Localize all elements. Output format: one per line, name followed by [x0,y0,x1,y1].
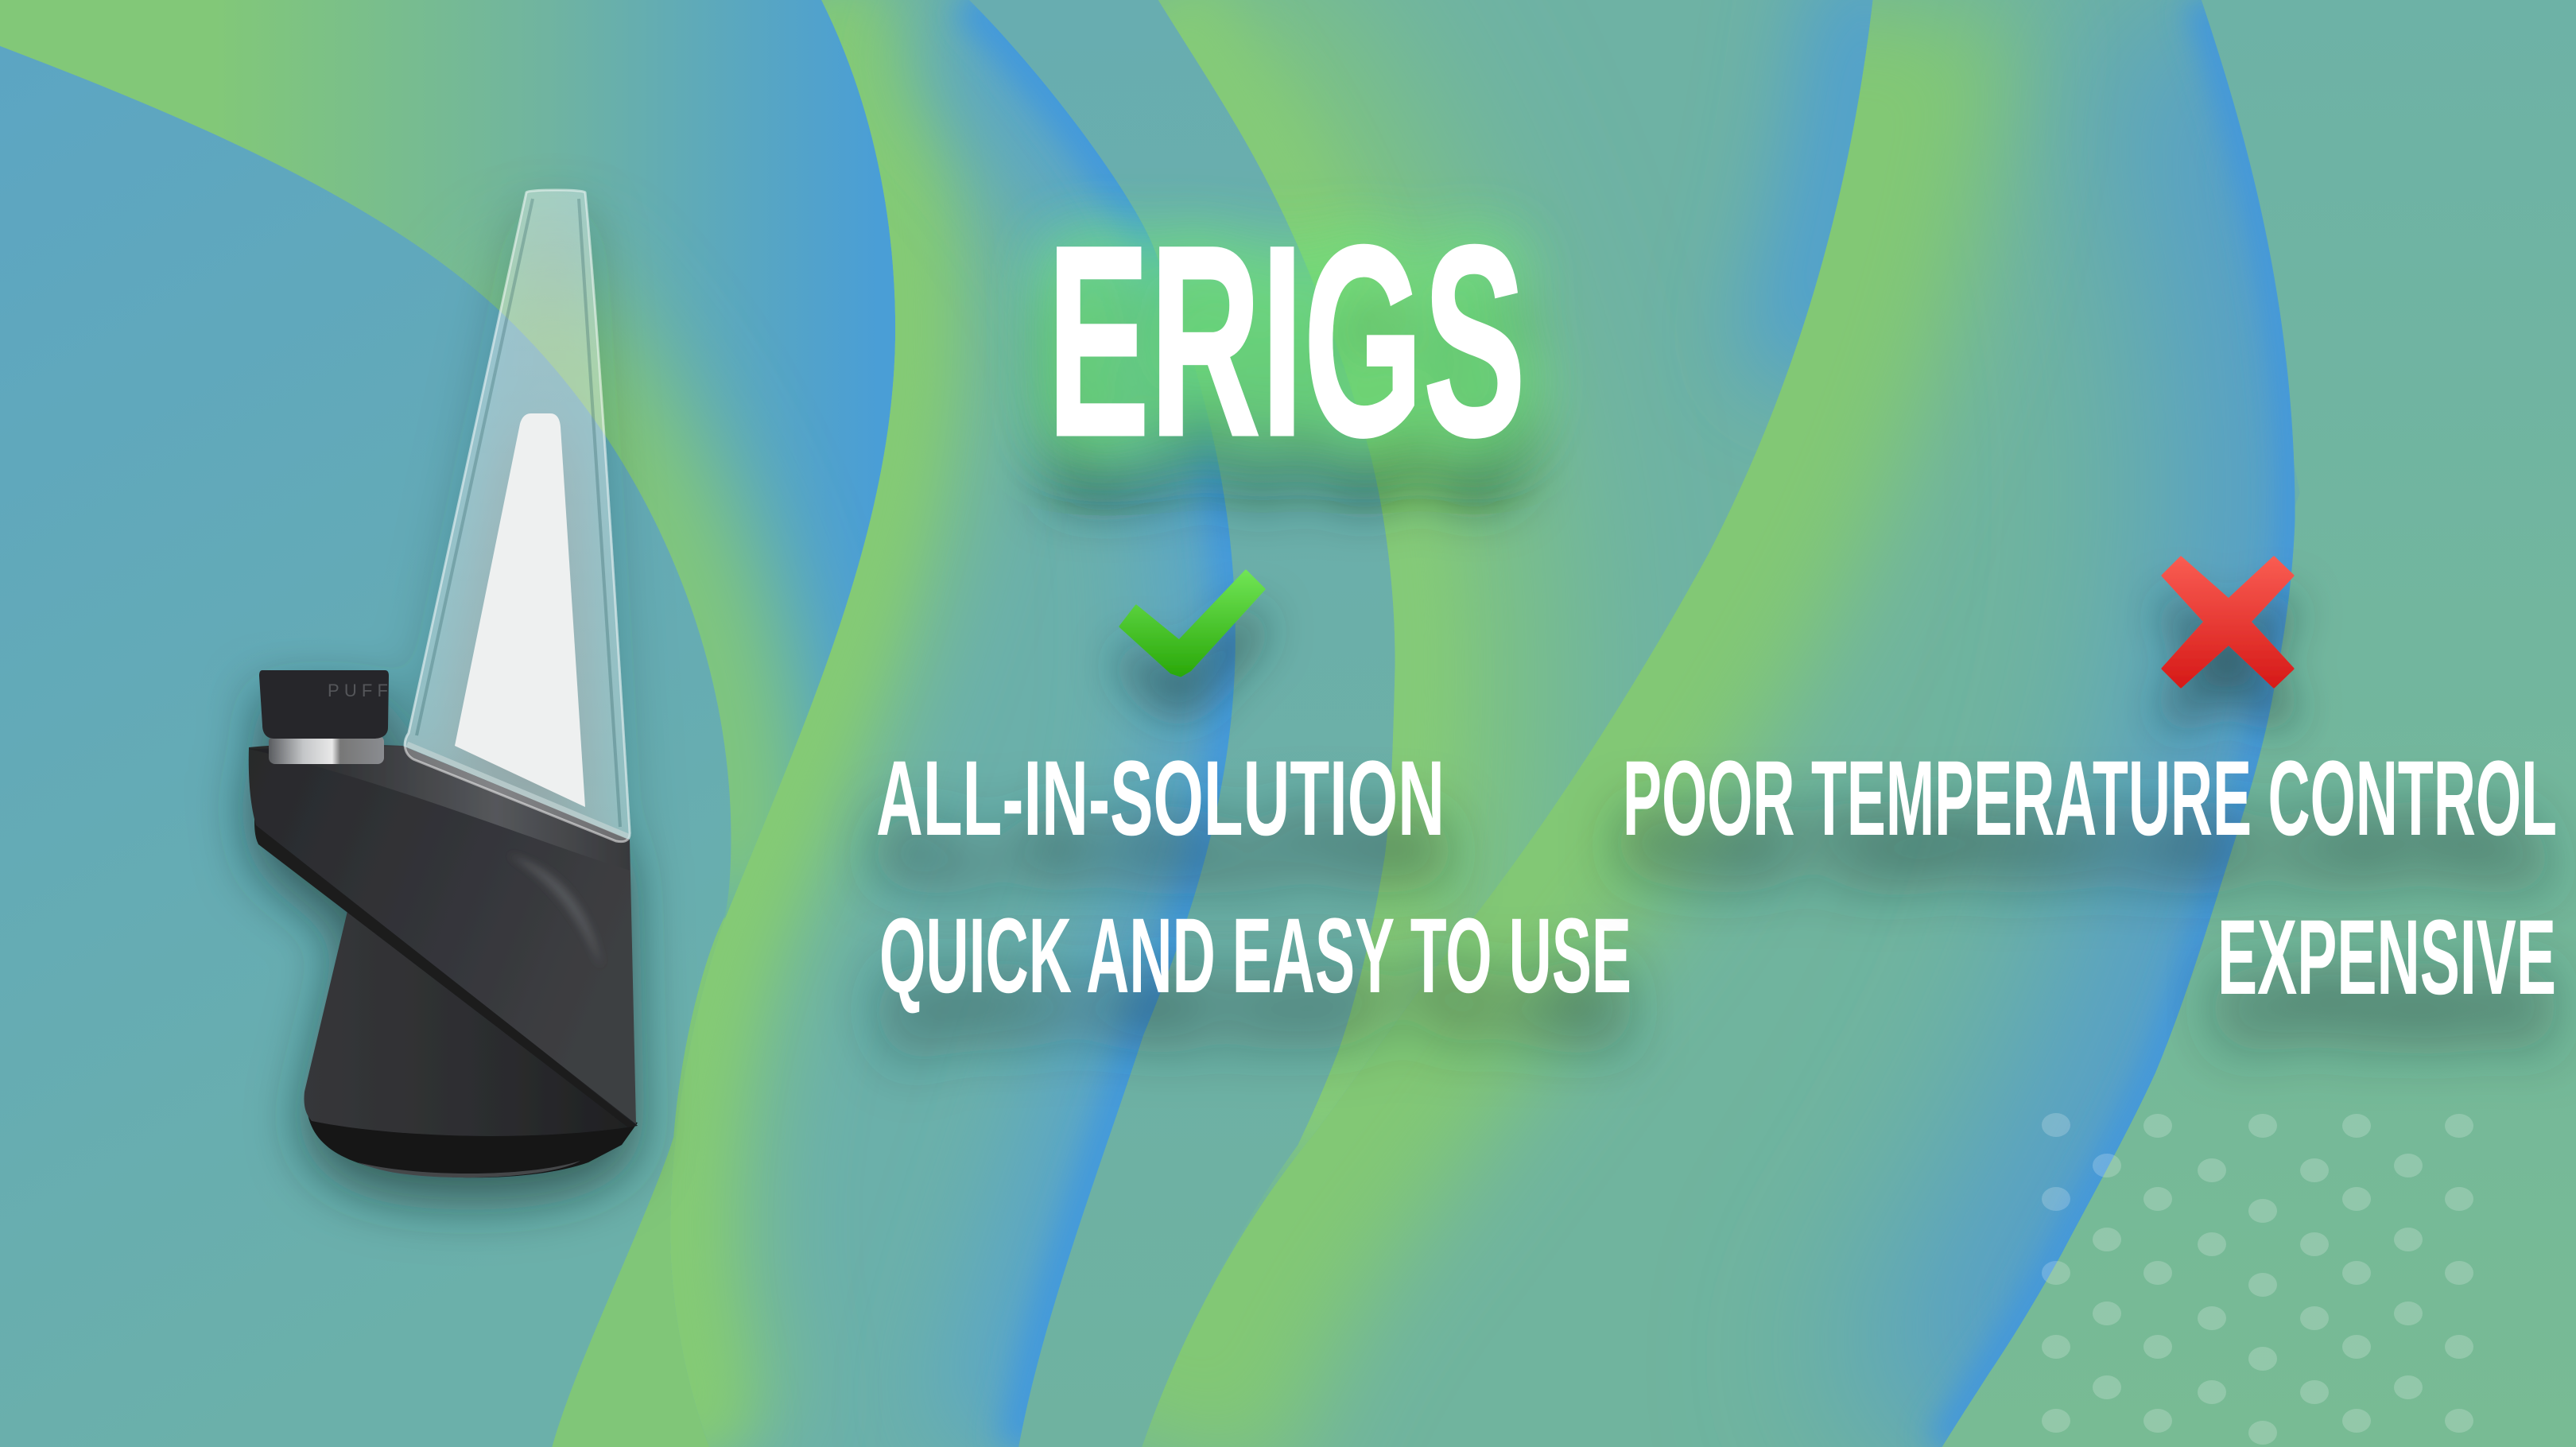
icon: green check [1120,571,1264,676]
band: centre-left green to blue [670,0,1236,1447]
glass inner core [455,413,585,807]
band: right flat region [1942,0,2576,1447]
dot pattern [2042,1113,2473,1445]
lower cone [304,894,638,1136]
cap [259,670,389,739]
metal ring [269,735,384,764]
upper shell [249,744,636,1124]
band: lower green wedge [542,821,731,1447]
icon: red cross [2163,557,2293,687]
foot [307,1089,638,1177]
glass inner wall [417,199,620,827]
underside strip [254,819,636,1127]
band: right green to blue [1117,0,2333,1447]
device: electric rig illustration [249,190,638,1177]
band: top-left green to blue [0,0,895,915]
glass base rim [407,744,628,836]
shell top highlight [249,746,630,871]
band: left teal region [0,46,731,1447]
pro: quick and easy to use: QUICK AND EASY TO USE [879,897,1631,1015]
title: ERIGS [1047,189,1526,493]
glass chamber [405,190,630,842]
pro: all-in-solution: ALL-IN-SOLUTION [876,739,1445,858]
cap label: PUFF [328,681,388,700]
foot lower disc [358,1161,580,1177]
shell crease [509,855,601,966]
band: centre green to teal [1158,0,1873,1202]
